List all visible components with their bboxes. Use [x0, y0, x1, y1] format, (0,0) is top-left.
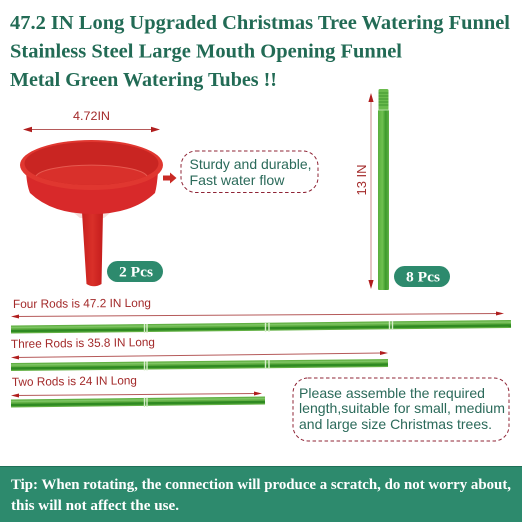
title: 47.2 IN Long Upgraded Christmas Tree Watering Funnel	[10, 13, 511, 34]
rod height dimension	[354, 93, 374, 289]
two rods assembly: Two Rods is 24 IN Long	[12, 373, 137, 389]
icon: single green rod	[378, 89, 389, 290]
arrow: funnel to callout	[163, 172, 176, 184]
badge: 8 Pcs: 8 Pcs	[406, 270, 440, 286]
callout: assembly note: and large size Christmas trees.	[299, 417, 492, 432]
rod height dimension: 13 IN	[354, 164, 369, 196]
badge: 2 Pcs: 2 Pcs	[119, 264, 153, 280]
funnel width dimension: 4.72IN	[73, 109, 110, 123]
title: Metal Green Watering Tubes !!	[10, 70, 277, 91]
callout: sturdy and durable	[181, 151, 318, 192]
callout: sturdy and durable: Sturdy and durable,	[190, 156, 312, 172]
callout: assembly note	[293, 378, 509, 441]
callout: sturdy and durable: Fast water flow	[190, 172, 285, 188]
badge: 8 Pcs	[394, 266, 450, 287]
funnel width dimension	[23, 109, 160, 132]
tip banner	[0, 466, 522, 522]
three rods assembly: Three Rods is 35.8 IN Long	[11, 335, 155, 351]
two rods assembly	[11, 373, 265, 407]
four rods assembly	[11, 296, 511, 333]
tip banner: Tip: When rotating, the connection will produce a scratch, do not worry about,	[11, 477, 511, 493]
callout: assembly note: Please assemble the required	[299, 386, 485, 401]
four rods assembly: Four Rods is 47.2 IN Long	[13, 296, 151, 311]
tip banner: this will not affect the use.	[11, 498, 179, 514]
three rods assembly	[11, 335, 388, 370]
title	[10, 13, 511, 91]
callout: assembly note: length,suitable for small, medium	[299, 401, 505, 416]
title: Stainless Steel Large Mouth Opening Funnel	[10, 42, 403, 62]
icon: red funnel	[20, 140, 163, 286]
badge: 2 Pcs	[107, 261, 163, 282]
